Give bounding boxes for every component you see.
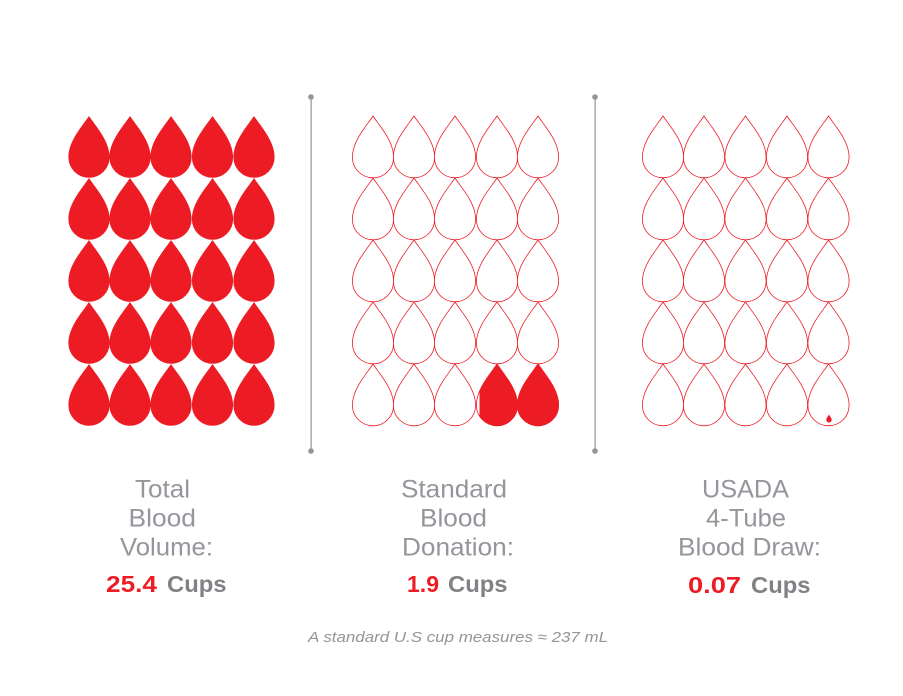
divider: left — [308, 94, 314, 454]
label: USADA 4-tube blood draw: 4-Tube — [706, 504, 786, 532]
value: 1.9 cups — [407, 571, 508, 597]
label: total blood volume: Total — [135, 476, 190, 504]
value: 25.4 cups: Cups — [167, 571, 226, 597]
footnote: A standard U.S cup measures ≈ 237 mL — [307, 629, 608, 646]
panel: USADA blood draw drops — [642, 116, 849, 426]
value: 0.07 cups: 0.07 — [688, 572, 741, 598]
value: 0.07 cups — [688, 572, 810, 598]
partially filled drop — [480, 364, 517, 426]
label: standard blood donation: Donation: — [402, 534, 514, 562]
value: 25.4 cups: 25.4 — [106, 571, 157, 597]
label: total blood volume — [120, 476, 213, 562]
label: standard blood donation: Blood — [420, 504, 487, 532]
label: total blood volume: Volume: — [120, 534, 213, 562]
label: standard blood donation — [401, 476, 514, 562]
panel: standard donation drops — [352, 116, 559, 426]
value: 25.4 cups — [106, 571, 226, 597]
label: USADA 4-tube blood draw — [678, 476, 821, 562]
value: 1.9 cups: Cups — [448, 571, 508, 597]
label: USADA 4-tube blood draw: Blood Draw: — [678, 534, 821, 562]
label: standard blood donation: Standard — [401, 476, 507, 504]
label: USADA 4-tube blood draw: USADA — [702, 476, 789, 504]
filled drop — [517, 364, 559, 426]
icon: tiny blood drop — [826, 414, 832, 422]
divider: right — [592, 94, 598, 454]
label: total blood volume: Blood — [128, 504, 196, 532]
value: 0.07 cups: Cups — [751, 572, 810, 598]
panel: total blood volume drops — [68, 116, 275, 426]
value: 1.9 cups: 1.9 — [407, 571, 439, 597]
